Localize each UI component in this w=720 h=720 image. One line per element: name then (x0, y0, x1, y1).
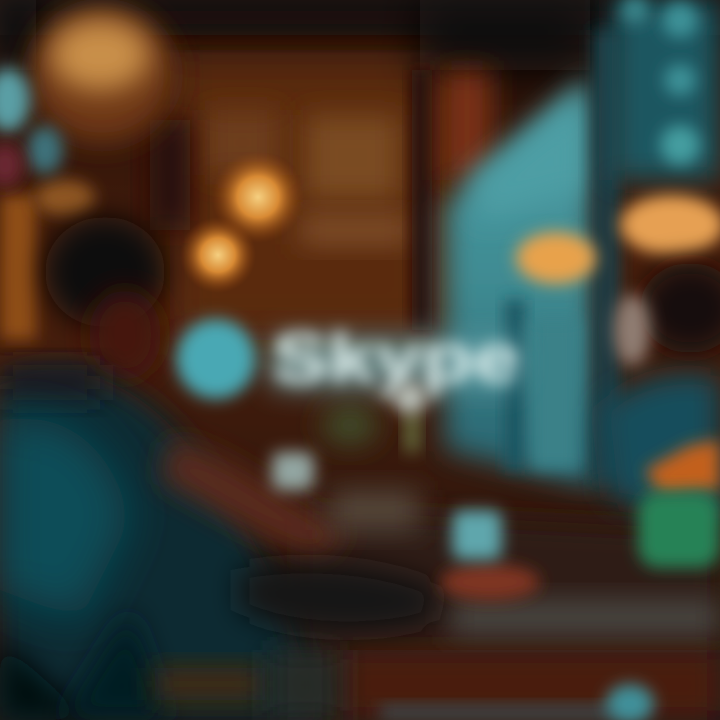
logo wordmark: Skype (272, 319, 520, 397)
lamp glows (30, 7, 304, 293)
left edge teal lights (0, 68, 63, 187)
orange glow over window (516, 195, 720, 284)
table items (272, 405, 502, 560)
green bottle and orange cap (638, 440, 720, 568)
left person (0, 217, 340, 720)
table surface (300, 510, 720, 720)
teal window panel (445, 30, 620, 490)
right person (600, 263, 720, 520)
arm and hand (160, 440, 540, 631)
teal top right blocks (612, 0, 720, 180)
logo circle (176, 319, 256, 399)
logo wordmark (268, 319, 520, 414)
